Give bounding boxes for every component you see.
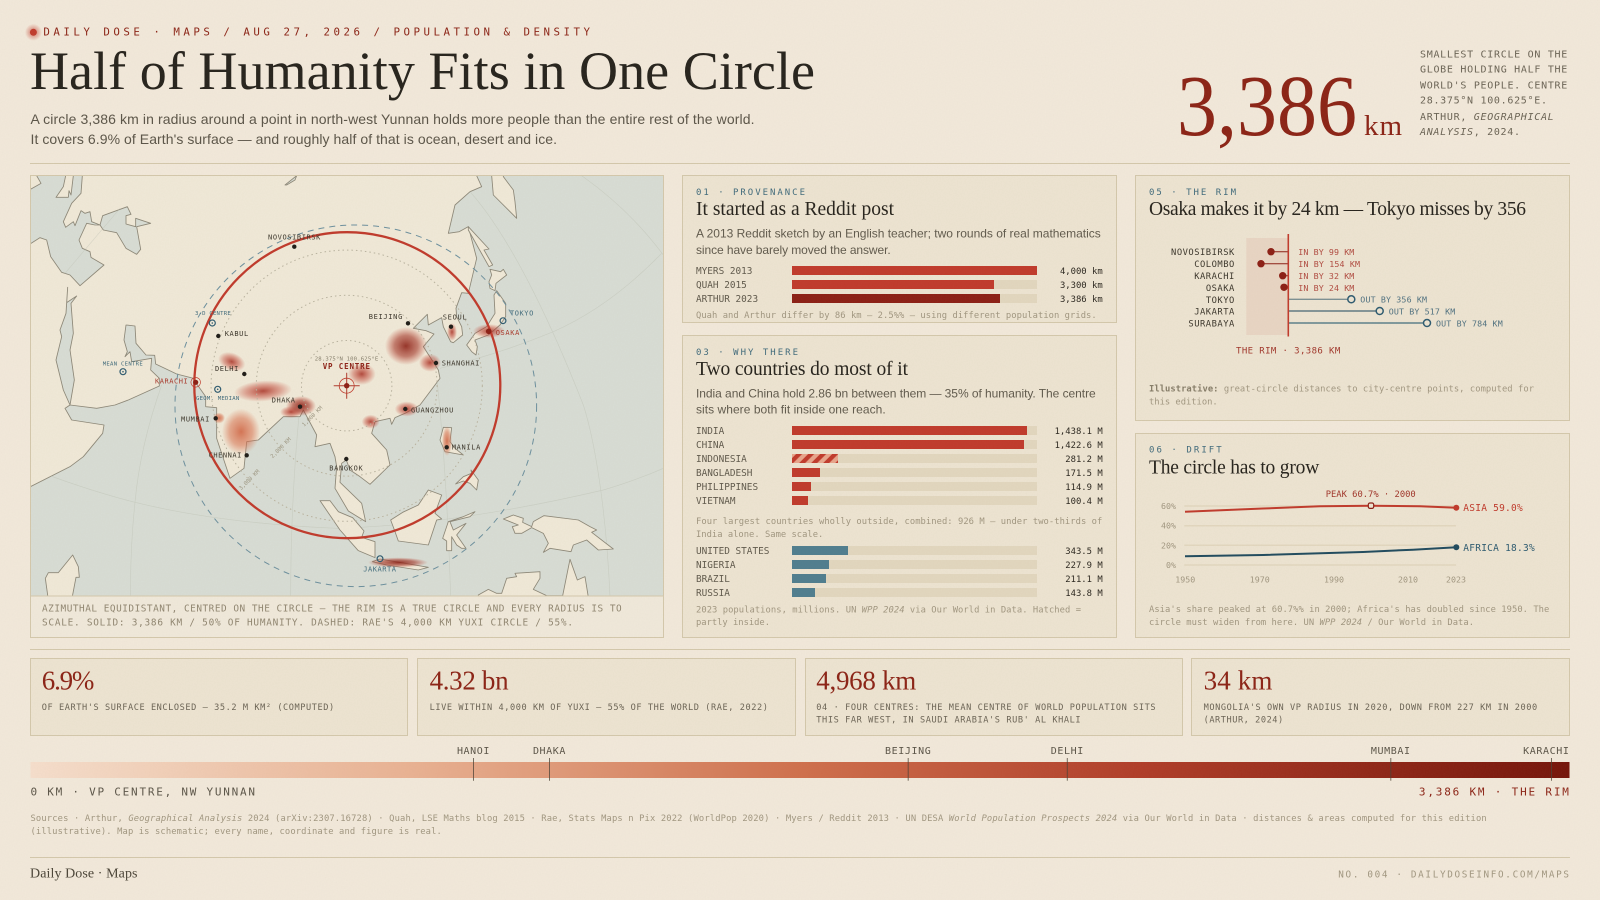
bar chart: inside countries: 100.4 M (1065, 497, 1103, 507)
note: Illustrative: great-circle distances to city-centre points, computed for (1149, 384, 1534, 395)
map: ring labels (238, 405, 325, 492)
stat: 4,968 km: 4,968 km (816, 665, 916, 695)
body text (696, 227, 1101, 257)
bar chart: outside countries: 211.1 M (1065, 575, 1103, 585)
heading: Osaka makes it by 24 km — Tokyo misses by 356 (1149, 199, 1526, 220)
stat: 4.32 bn (418, 658, 796, 736)
distance ramp: KARACHI (1523, 746, 1570, 757)
sources: (illustrative). Map is schematic; every name, coordinate and figure is real. (30, 827, 442, 837)
sources: Sources · Arthur, Geographical Analysis 2024 (arXiv:2307.16728) · Quah, LSE Maths blog 2015 · Rae, Stats Maps n Pix 2022 (WorldPop 2020) · Myers / Reddit 2013 · UN DESA World Population Prospects 2024 via Our World in Data · distances & areas computed for this edition (30, 814, 1487, 824)
map: inside-city markers and labels (181, 233, 481, 473)
line chart: share of world population: AFRICA 18.3% (1463, 543, 1535, 554)
map: inside-city markers and labels: BANGKOK (329, 465, 363, 473)
bar chart: radius estimates: MYERS 2013 (696, 266, 752, 277)
map: VP centre marker: 28.375°N 100.625°E (315, 357, 379, 363)
stat: 4.32 bn: 4.32 bn (430, 665, 509, 695)
subtitle: It covers 6.9% of Earth's surface — and roughly half of that is ocean, desert and ice. (30, 131, 557, 147)
map: rim cities: JAKARTA (363, 566, 397, 574)
line chart: share of world population: 1970 (1250, 575, 1270, 585)
headline figure: 3,386 (1177, 57, 1357, 154)
distance ramp: DHAKA (533, 746, 566, 757)
line chart: share of world population: 0% (1166, 560, 1176, 570)
bar chart: inside countries (696, 426, 1103, 507)
header eyebrow: DAILY DOSE · MAPS / AUG 27, 2026 / POPULATION & DENSITY (43, 26, 590, 39)
lollipop chart: distance from rim: IN BY 24 KM (1298, 283, 1354, 293)
line chart: share of world population: PEAK 60.7% · 2000 (1326, 490, 1416, 500)
bar chart: outside countries: 343.5 M (1065, 547, 1103, 557)
panel: map (20, 170, 687, 638)
lollipop chart: distance from rim: COLOMBO (1194, 260, 1235, 270)
lollipop chart: distance from rim: TOKYO (1206, 296, 1235, 306)
map: inside-city markers and labels: SEOUL (443, 314, 467, 322)
body text: India and China hold 2.86 bn between them — 35% of humanity. The centre (696, 387, 1096, 401)
map: VP centre marker (315, 357, 379, 399)
note: Quah and Arthur differ by 86 km — 2.5%% — using different population grids. (696, 311, 1097, 321)
body text: sits where both fit inside one reach. (696, 403, 886, 417)
bar chart: inside countries: 171.5 M (1065, 469, 1103, 479)
map: inside-city markers and labels: NOVOSIBIRSK (268, 233, 321, 241)
subtitle (30, 111, 754, 147)
map: dashed 4,000 km Yuxi circle (175, 225, 537, 587)
stat: 4,968 km: THIS FAR WEST, IN SAUDI ARABIA'S RUB' AL KHALI (816, 716, 1081, 726)
panel: 03 why there (682, 336, 1116, 638)
bar chart: outside countries: RUSSIA (696, 588, 730, 599)
line chart: share of world population: 2010 (1398, 575, 1418, 585)
stat: 6.9%: 6.9% (42, 665, 94, 695)
bar chart: inside countries: CHINA (696, 440, 725, 451)
map caption: SCALE. SOLID: 3,386 KM / 50% OF HUMANITY. DASHED: RAE'S 4,000 KM YUXI CIRCLE / 55%. (42, 618, 573, 629)
lollipop chart: distance from rim: THE RIM · 3,386 KM (1236, 347, 1341, 357)
map: population centres: GEOM. MEDIAN (196, 396, 239, 402)
bar chart: radius estimates: 4,000 km (1060, 267, 1103, 277)
line chart: share of world population: 20% (1161, 540, 1176, 550)
map: inside-city markers and labels: KABUL (225, 330, 248, 338)
lollipop chart: distance from rim: OUT BY 517 KM (1389, 306, 1455, 316)
map: inside-city markers and labels: MUMBAI (181, 416, 209, 424)
map caption: AZIMUTHAL EQUIDISTANT, CENTRED ON THE CIRCLE — THE RIM IS A TRUE CIRCLE AND EVERY RADIUS IS TO (42, 604, 622, 615)
kicker: 05 · THE RIM (1149, 188, 1237, 198)
distance ramp: BEIJING (885, 746, 931, 757)
bar chart: inside countries: 114.9 M (1065, 483, 1103, 493)
stat: 6.9%: OF EARTH'S SURFACE ENCLOSED — 35.2 M KM² (COMPUTED) (42, 703, 334, 713)
map: population centres: 3-D CENTRE (195, 311, 231, 317)
line chart: share of world population: 1950 (1175, 575, 1195, 585)
bar chart: radius estimates (696, 266, 1103, 305)
map: land and sea (20, 170, 687, 603)
map: rim cities: KARACHI (155, 377, 188, 385)
bar chart: outside countries: NIGERIA (696, 560, 736, 571)
bar chart: radius estimates: QUAH 2015 (696, 280, 747, 291)
stat: 4,968 km: 04 · FOUR CENTRES: THE MEAN CENTRE OF WORLD POPULATION SITS (816, 703, 1156, 713)
map: rim cities: TOKYO (510, 310, 533, 318)
map: VP centre marker: VP CENTRE (323, 362, 370, 371)
distance ramp: 3,386 KM · THE RIM (1419, 785, 1569, 798)
heading: It started as a Reddit post (696, 199, 895, 220)
map: inside-city markers and labels: BEIJING (369, 313, 402, 321)
bar chart: inside countries: PHILIPPINES (696, 482, 758, 493)
bar chart: outside countries: UNITED STATES (696, 546, 770, 557)
line chart: share of world population: ASIA 59.0% (1463, 503, 1523, 514)
heading: Two countries do most of it (696, 359, 909, 380)
line chart: share of world population: 2023 (1446, 575, 1466, 585)
note: outside countries: India alone. Same scale. (696, 530, 823, 540)
lollipop chart: distance from rim: JAKARTA (1194, 308, 1235, 318)
footer brand: Daily Dose · Maps (30, 867, 138, 882)
bar chart: outside countries: 227.9 M (1065, 561, 1103, 571)
lollipop chart: distance from rim: OUT BY 356 KM (1360, 294, 1427, 304)
note (1149, 384, 1534, 408)
headline figure: km (1364, 110, 1402, 142)
heading: The circle has to grow (1149, 457, 1319, 478)
map: population centres (103, 311, 239, 402)
stat: 34 km: MONGOLIA'S OWN VP RADIUS IN 2020, DOWN FROM 227 KM IN 2000 (1204, 703, 1537, 713)
note: this edition. (1149, 398, 1218, 408)
bar chart: outside countries: 143.8 M (1065, 589, 1103, 599)
headline note: WORLD'S PEOPLE. CENTRE (1420, 81, 1567, 92)
map: population centres: MEAN CENTRE (103, 362, 143, 368)
map: ring labels: 2,000 KM (270, 436, 293, 460)
lollipop chart: distance from rim: IN BY 32 KM (1298, 271, 1354, 281)
sources (30, 814, 1487, 837)
bar chart: inside countries: BANGLADESH (696, 468, 753, 479)
note: circle must widen from here. UN WPP 2024 / Our World in Data. (1149, 618, 1474, 628)
bar chart: outside countries (696, 546, 1103, 599)
lollipop chart: distance from rim: OSAKA (1206, 284, 1235, 294)
lollipop chart: distance from rim: OUT BY 784 KM (1436, 318, 1503, 328)
map: rim cities (155, 310, 533, 574)
lollipop chart: distance from rim: SURABAYA (1188, 320, 1235, 330)
map: inside-city markers and labels: GUANGZHOU (411, 407, 453, 415)
stat: 4,968 km (806, 658, 1182, 736)
headline note: GLOBE HOLDING HALF THE (1420, 65, 1567, 76)
stat: 6.9% (30, 658, 408, 736)
distance ramp: HANOI (457, 746, 490, 757)
kicker: 06 · DRIFT (1149, 446, 1222, 456)
kicker: 03 · WHY THERE (696, 348, 798, 358)
distance ramp: DELHI (1051, 746, 1084, 757)
headline note: 28.375°N 100.625°E. (1420, 96, 1547, 107)
note: outside countries (696, 517, 1102, 540)
bar chart: inside countries: 1,422.6 M (1055, 441, 1103, 451)
panel: 06 drift (1136, 434, 1570, 638)
note: Asia's share peaked at 60.7%% in 2000; Africa's has doubled since 1950. The (1149, 605, 1549, 615)
distance ramp: MUMBAI (1371, 746, 1411, 757)
map caption (42, 604, 622, 629)
bar chart: inside countries: INDIA (696, 426, 725, 437)
lollipop chart: distance from rim: NOVOSIBIRSK (1171, 248, 1235, 258)
footer edition: NO. 004 · DAILYDOSEINFO.COM/MAPS (1338, 870, 1569, 881)
bar chart: radius estimates: ARTHUR 2023 (696, 294, 758, 305)
map: inside-city markers and labels: DHAKA (272, 396, 296, 404)
distance ramp: 0 KM · VP CENTRE, NW YUNNAN (30, 785, 255, 798)
headline note: ARTHUR, GEOGRAPHICAL (1420, 112, 1554, 123)
line chart: share of world population: 60% (1161, 501, 1176, 511)
lollipop chart: distance from rim: IN BY 154 KM (1298, 259, 1360, 269)
title: Half of Humanity Fits in One Circle (30, 41, 815, 101)
map: distance rings (211, 250, 482, 521)
map: ring labels: 1,000 KM (301, 405, 325, 428)
bar chart: inside countries: VIETNAM (696, 496, 736, 507)
note: outside countries: Four largest countries wholly outside, combined: 926 M — under two-thirds of (696, 517, 1102, 527)
distance ramp (30, 746, 1570, 798)
map: ring labels: 3,000 KM (238, 468, 262, 492)
stat: 34 km: (ARTHUR, 2024) (1204, 716, 1283, 726)
note: sources: 2023 populations, millions. UN WPP 2024 via Our World in Data. Hatched = (696, 606, 1081, 616)
panel: 01 provenance (682, 176, 1116, 322)
bar chart: inside countries: 281.2 M (1065, 455, 1103, 465)
bar chart: inside countries: INDONESIA (696, 454, 747, 465)
note: sources: partly inside. (696, 618, 770, 628)
map: inside-city markers and labels: DELHI (215, 365, 238, 373)
map: inside-city markers and labels: SHANGHAI (442, 360, 479, 368)
note (1149, 605, 1549, 628)
map: inside-city markers and labels: CHENNAI (209, 452, 241, 460)
stat: 34 km (1192, 658, 1570, 736)
kicker: 01 · PROVENANCE (696, 188, 805, 198)
stat: 34 km: 34 km (1204, 665, 1272, 695)
lollipop chart: distance from rim (1171, 234, 1503, 357)
body text (696, 387, 1096, 417)
line chart: share of world population: 1990 (1324, 575, 1344, 585)
body text: A 2013 Reddit sketch by an English teacher; two rounds of real mathematics (696, 227, 1101, 241)
line chart: share of world population: 40% (1161, 521, 1176, 531)
map: inside-city markers and labels: MANILA (452, 444, 481, 452)
lollipop chart: distance from rim: KARACHI (1194, 272, 1235, 282)
line chart: share of world population (1161, 490, 1535, 585)
map: rim cities: OSAKA (496, 329, 520, 337)
body text: since have barely moved the answer. (696, 243, 891, 257)
headline note (1419, 50, 1567, 138)
map: population heat (213, 323, 505, 568)
lollipop chart: distance from rim: IN BY 99 KM (1298, 247, 1354, 257)
headline note: ANALYSIS, 2024. (1419, 127, 1520, 138)
map: solid 3,386 km circle (194, 232, 500, 538)
note: sources (696, 606, 1081, 628)
bar chart: radius estimates: 3,386 km (1060, 295, 1103, 305)
headline note: SMALLEST CIRCLE ON THE (1420, 50, 1567, 61)
stat: 4.32 bn: LIVE WITHIN 4,000 KM OF YUXI — 55% OF THE WORLD (RAE, 2022) (430, 703, 768, 713)
subtitle: A circle 3,386 km in radius around a point in north-west Yunnan holds more people than the entire rest of the world. (30, 111, 754, 127)
panel: 05 the rim (1136, 176, 1570, 420)
bar chart: radius estimates: 3,300 km (1060, 281, 1103, 291)
bar chart: inside countries: 1,438.1 M (1055, 427, 1103, 437)
bar chart: outside countries: BRAZIL (696, 574, 730, 585)
